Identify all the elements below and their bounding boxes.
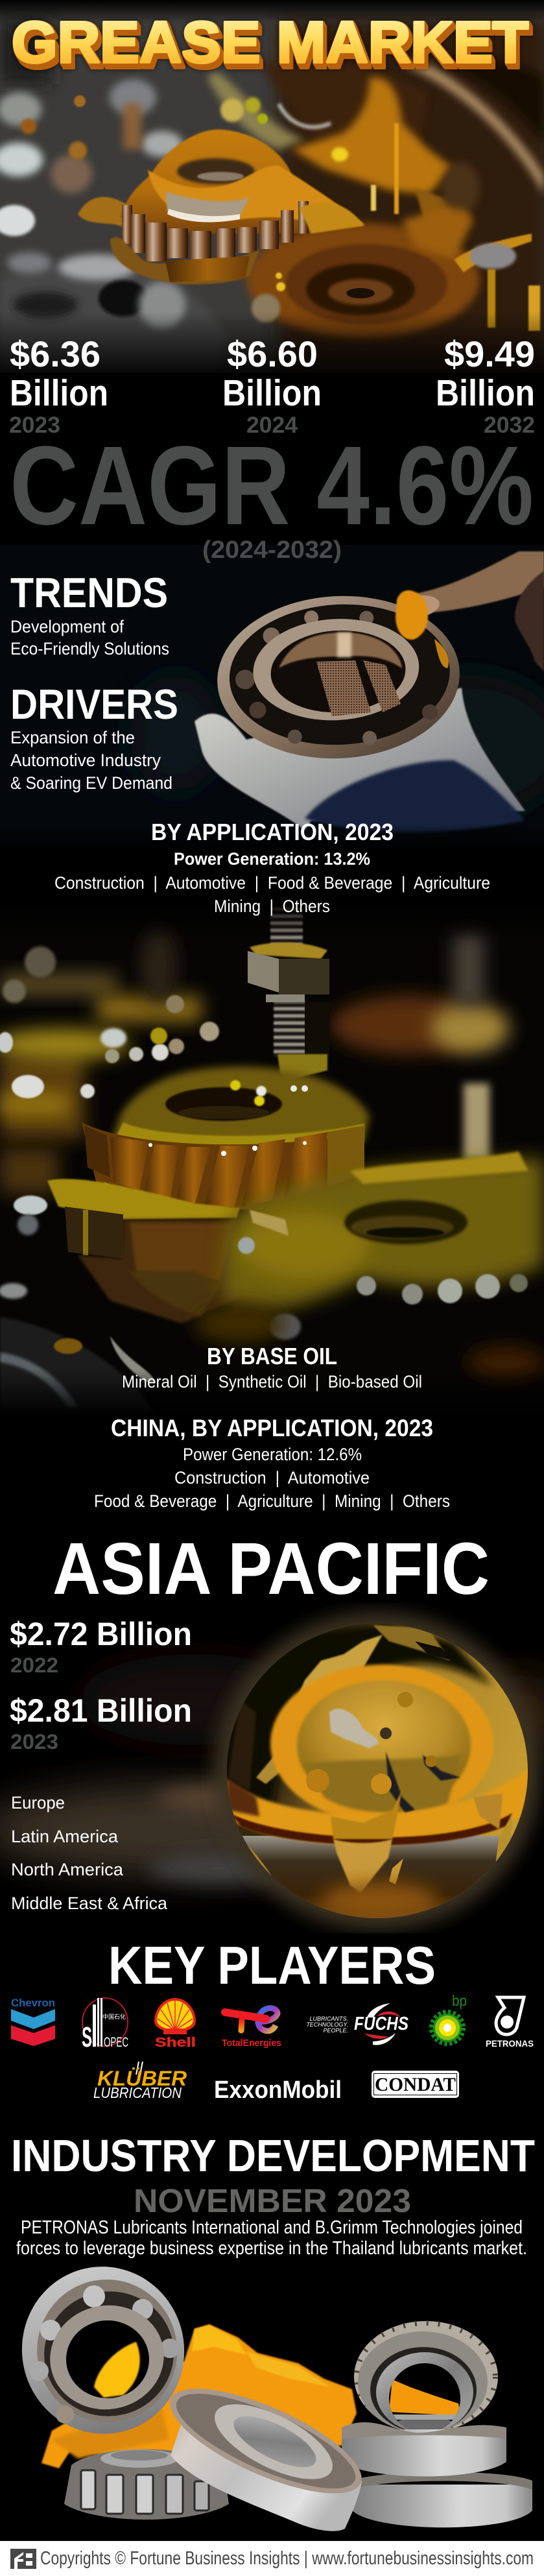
logo: bp: bp: [452, 1992, 467, 2009]
tapered cage, right: [354, 2321, 498, 2436]
logo: Klüber Lubrication: [93, 2062, 187, 2101]
bolt and nut: [248, 902, 329, 1080]
stacked rings, right: [342, 2422, 532, 2527]
segment: by application: Power Generation: 13.2%: [174, 849, 370, 869]
oil pool: [0, 1151, 544, 1417]
ball bearing: [8, 2254, 198, 2447]
stat: 2024 value: 2024: [246, 413, 298, 438]
heading: Asia Pacific: ASIA PACIFIC: [53, 1528, 490, 1609]
stat: 2024 value: Billion: [222, 372, 322, 414]
upper-right oil swirl: [205, 54, 544, 218]
list of regions: Europe: [11, 1793, 65, 1812]
segment: by application: [54, 819, 490, 916]
text block: trends: [10, 569, 169, 658]
title: GREASE MARKET: [12, 10, 528, 75]
stat: 2023 value: Billion: [10, 372, 108, 414]
logo: Sinopec: [82, 1998, 128, 2053]
grease lump: [41, 2324, 357, 2468]
tapered roller bearing, left: [64, 2449, 229, 2520]
stat: 2032 value: $9.49: [444, 333, 535, 374]
CAGR period: (2024-2032): [202, 536, 342, 564]
logo: Sinopec: 中国石化: [102, 2013, 126, 2020]
text block: trends: Eco-Friendly Solutions: [10, 639, 169, 658]
logo: Fuchs: [306, 2003, 409, 2045]
logo: Chevron: [11, 1997, 55, 2046]
stat: 2024 value: [222, 333, 322, 438]
list of regions: Latin America: [11, 1827, 119, 1846]
segment: by application: Mining | Others: [214, 897, 330, 916]
bokeh highlights: [0, 946, 219, 1235]
segment: China by application: CHINA, BY APPLICATION, 2023: [111, 1415, 433, 1441]
second gear, lower right: [246, 208, 540, 337]
footer logo: [10, 2549, 36, 2569]
hero photo: greased gears: [0, 0, 544, 373]
text block: drivers: [10, 680, 178, 793]
list of regions: Middle East & Africa: [11, 1894, 168, 1913]
stat: 2032 value: [436, 333, 535, 438]
logo: Shell: [154, 1998, 196, 2050]
market values: Asia Pacific: 2023: [10, 1730, 58, 1753]
text block: trends: TRENDS: [10, 569, 168, 616]
segment: by application: BY APPLICATION, 2023: [151, 819, 394, 845]
logo: Fuchs: PEOPLE.: [323, 2027, 348, 2034]
logo: Sinopec: S: [82, 2021, 92, 2053]
heading: key players: KEY PLAYERS: [108, 1935, 436, 1995]
logo: Fuchs: FUCHS: [354, 2014, 409, 2034]
logo: Fuchs: LUBRICANTS.: [309, 2016, 348, 2022]
photo: gears in oil: [0, 902, 544, 1417]
stat: 2032 value: 2032: [484, 413, 535, 438]
segment: China by application: [94, 1415, 450, 1511]
logo: Shell: Shell: [155, 2036, 196, 2050]
greased gear: [78, 129, 364, 284]
list of regions: North America: [11, 1860, 124, 1879]
text block: drivers: Automotive Industry: [10, 751, 161, 770]
development description: [16, 2217, 527, 2259]
illustration: bearings and grease: [8, 2254, 532, 2531]
date: November 2023: NOVEMBER 2023: [134, 2182, 411, 2219]
stat: 2023 value: 2023: [9, 413, 60, 438]
logo: Petronas: PETRONAS: [486, 2038, 534, 2049]
segment: China by application: Power Generation: 12.6%: [183, 1445, 362, 1464]
segment: by base oil: BY BASE OIL: [207, 1343, 337, 1369]
tilted ball bearing, centre: [158, 2368, 374, 2531]
list of regions: [11, 1793, 168, 1913]
logo: Klüber Lubrication: LUBRICATION: [93, 2084, 182, 2101]
market values: Asia Pacific: 2022: [10, 1654, 58, 1677]
stat: 2024 value: $6.60: [227, 333, 318, 374]
text block: drivers: Expansion of the: [10, 728, 135, 747]
segment: by application: Construction | Automotive | Food & Beverage | Agriculture: [54, 873, 490, 893]
logo: Condat: CONDAT: [375, 2074, 456, 2095]
logo: Fuchs: TECHNOLOGY.: [306, 2021, 348, 2028]
logo: Sinopec: OPEC: [104, 2035, 128, 2050]
logo: TotalEnergies: [222, 2008, 281, 2049]
market values: Asia Pacific: $2.72 Billion: [10, 1616, 192, 1652]
market values: Asia Pacific: $2.81 Billion: [10, 1692, 192, 1729]
logo: ExxonMobil: ExxonMobil: [214, 2076, 342, 2104]
logo: Klüber Lubrication: KLÜBER: [97, 2067, 187, 2090]
footer bar: [0, 2541, 544, 2576]
segment: China by application: Construction | Automotive: [174, 1468, 370, 1487]
market values: Asia Pacific: [10, 1616, 192, 1753]
segment: by base oil: Mineral Oil | Synthetic Oil | Bio-based Oil: [122, 1372, 422, 1391]
logo: TotalEnergies: TotalEnergies: [222, 2038, 281, 2049]
segment: by base oil: [122, 1343, 422, 1391]
text block: trends: Development of: [10, 617, 124, 636]
logo: Petronas: [486, 1997, 534, 2049]
stat: 2023 value: $6.36: [10, 333, 101, 374]
text block: drivers: DRIVERS: [10, 680, 178, 728]
gold gear: [47, 1066, 370, 1323]
globe illustration: [0, 1612, 544, 1930]
logo: Chevron: Chevron: [11, 1997, 55, 2009]
photo: bearing being greased: [0, 545, 544, 850]
logo: bp: [431, 1992, 467, 2044]
text block: drivers: & Soaring EV Demand: [10, 773, 172, 793]
stat: 2023 value: [9, 333, 108, 438]
segment: China by application: Food & Beverage | Agriculture | Mining | Others: [94, 1491, 450, 1511]
